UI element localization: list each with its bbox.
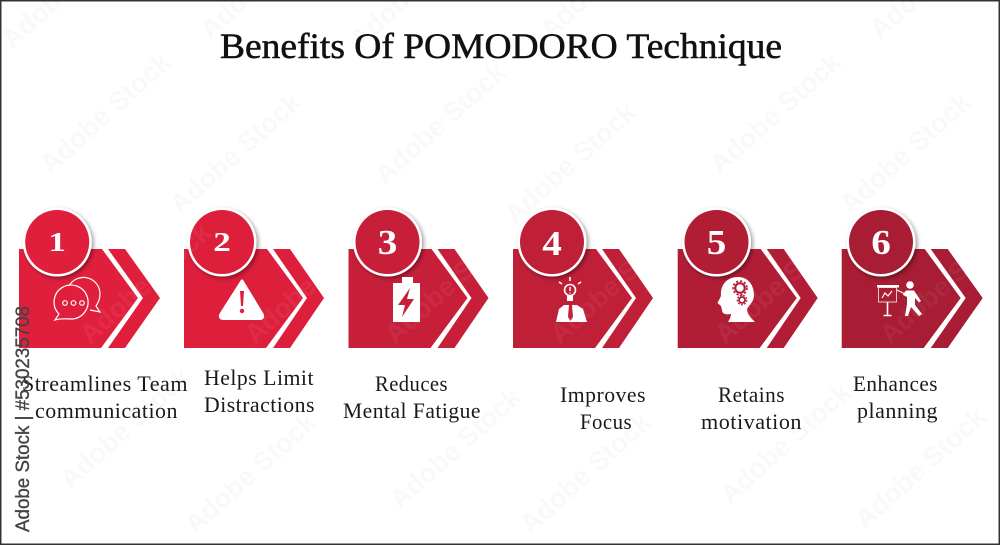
number badge 1 [23, 208, 92, 276]
label 6 [853, 371, 938, 423]
label 6: Enhances [853, 371, 938, 396]
label 2: Helps Limit [204, 365, 314, 390]
infographic canvas: Adobe Stock [179, 406, 322, 539]
number badge 3: 3 [378, 224, 397, 262]
arrow card 3 [348, 249, 488, 348]
icon: chat bubbles [54, 277, 100, 320]
faint watermark over the cards: Adobe Stock [709, 216, 852, 349]
number badge 5 [682, 208, 751, 276]
infographic canvas: Adobe Stock [384, 381, 527, 514]
number badge 3 [353, 208, 422, 276]
number badge 6: 6 [871, 224, 891, 262]
step 1: streamlines team communication [19, 208, 188, 423]
infographic canvas: Adobe Stock [164, 86, 307, 219]
icon: warning triangle [220, 281, 263, 318]
label 1: communication [35, 398, 178, 423]
label 6: planning [857, 398, 938, 423]
title: Benefits Of POMODORO Technique [220, 26, 782, 66]
number badge 1: 1 [48, 227, 66, 257]
infographic canvas: Adobe Stock [849, 401, 992, 534]
faint watermark over the cards: Adobe Stock [544, 216, 687, 349]
icon: head with gears [718, 277, 755, 322]
number badge 4: 4 [542, 225, 562, 263]
arrow card 2 [184, 249, 324, 348]
label 5 [701, 382, 802, 434]
label 2 [204, 365, 315, 417]
label 4: Improves [560, 382, 646, 407]
infographic canvas: Adobe Stock [499, 96, 642, 229]
label 3: Reduces [375, 371, 448, 396]
number badge 4 [518, 208, 586, 276]
number badge 5: 5 [707, 224, 726, 262]
step 6: enhances planning [842, 208, 983, 423]
arrow card 1 [19, 249, 160, 348]
icon: presenter with chart [877, 281, 922, 316]
infographic canvas: Adobe Stock [54, 361, 197, 494]
label 5: motivation [701, 409, 802, 434]
icon: idea person [556, 277, 587, 322]
label 4 [560, 382, 646, 434]
step 2: helps limit distractions [184, 208, 324, 417]
infographic canvas: Adobe Stock [514, 406, 657, 539]
faint watermark over the cards: Adobe [239, 271, 321, 349]
infographic canvas: Adobe Stock [834, 86, 977, 219]
arrow card 6 [842, 249, 983, 348]
infographic canvas: Adobe Stock [369, 56, 512, 189]
infographic canvas: Adobe Stock [704, 46, 847, 179]
number badge 6 [846, 208, 916, 276]
number badge 2 [188, 208, 256, 276]
label 3: Mental Fatigue [343, 398, 481, 423]
label 2: Distractions [204, 392, 315, 417]
icon: battery [393, 277, 420, 322]
step 5: retains motivation [678, 208, 818, 434]
arrow card 4 [513, 249, 653, 348]
label 5: Retains [718, 382, 785, 407]
faint watermark over the cards: Adobe Stock [379, 216, 522, 349]
arrow card 5 [678, 249, 818, 348]
faint watermark over the cards: Adobe Stock [74, 216, 217, 349]
step 4: improves focus [513, 208, 653, 434]
infographic canvas: Adobe Stock [714, 376, 857, 509]
label 3 [343, 371, 481, 423]
faint watermark over the cards [74, 216, 1000, 349]
label 4: Focus [580, 409, 632, 434]
stock id watermark: Adobe Stock | #530235708 [13, 306, 34, 532]
number badge 2: 2 [213, 227, 231, 257]
label 1: Streamlines Team [22, 371, 188, 396]
infographic canvas: Adobe Stock [34, 46, 177, 179]
label 1 [22, 371, 188, 423]
step 3: reduces mental fatigue [343, 208, 488, 423]
